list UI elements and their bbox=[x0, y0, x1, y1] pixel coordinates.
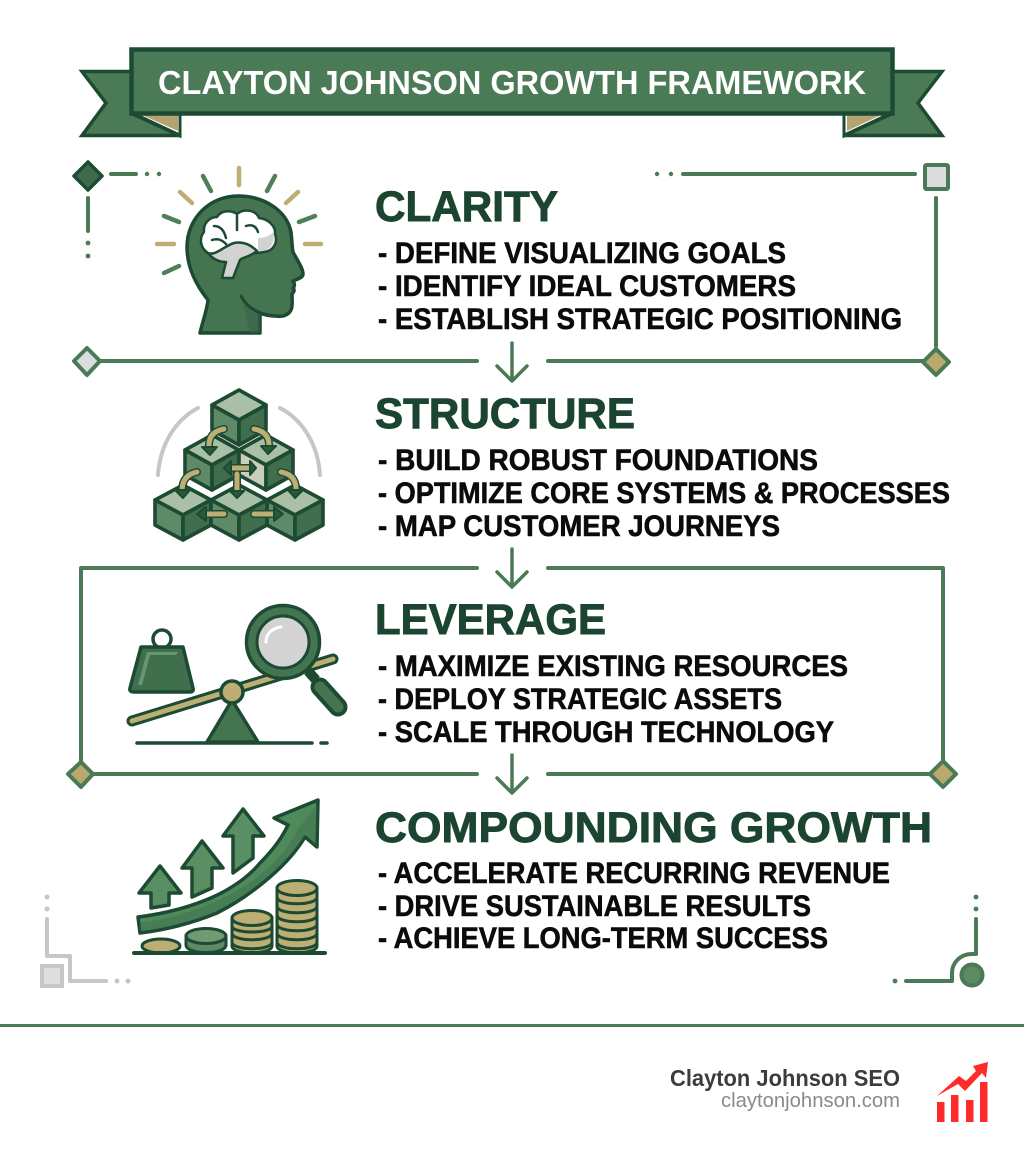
footer brand text: claytonjohnson.com bbox=[721, 1090, 900, 1112]
icon: head with brain bbox=[157, 168, 321, 333]
base line bbox=[134, 951, 325, 955]
heading: STRUCTURE bbox=[375, 390, 635, 438]
bullet list bbox=[378, 444, 950, 543]
bullet list: - ESTABLISH STRATEGIC POSITIONING bbox=[378, 303, 902, 336]
brain bbox=[201, 211, 276, 278]
bullet list: - DEFINE VISUALIZING GOALS bbox=[378, 237, 786, 270]
bullet list: - IDENTIFY IDEAL CUSTOMERS bbox=[378, 270, 796, 303]
bullet list bbox=[378, 650, 848, 749]
frame: bottom-right green ornament bbox=[893, 895, 982, 986]
banner ribbon bbox=[132, 50, 892, 114]
lever beam bbox=[132, 659, 333, 721]
bullet list: - BUILD ROBUST FOUNDATIONS bbox=[378, 444, 818, 477]
arrow: structure to leverage bbox=[497, 549, 527, 587]
footer brand text: Clayton Johnson SEO bbox=[670, 1065, 900, 1091]
frame: top-right corner and side rail bbox=[655, 165, 948, 346]
rays bbox=[157, 168, 321, 273]
bullet list: - DEPLOY STRATEGIC ASSETS bbox=[378, 683, 782, 716]
small up arrows bbox=[139, 809, 264, 908]
head silhouette bbox=[187, 196, 303, 333]
connector 1 with diamonds bbox=[74, 348, 949, 375]
bullet list: - MAP CUSTOMER JOURNEYS bbox=[378, 510, 780, 543]
bullet list bbox=[378, 237, 902, 336]
frame: leverage box bbox=[68, 568, 956, 787]
flow arrows bbox=[175, 429, 303, 521]
frame: bottom-left gray ornament bbox=[42, 894, 130, 986]
icon: lever with weight and magnifier bbox=[130, 606, 338, 743]
bullet list: - ACHIEVE LONG-TERM SUCCESS bbox=[378, 922, 828, 955]
frame: top-left corner ornament bbox=[74, 162, 161, 258]
magnifier bbox=[246, 606, 338, 707]
heading: COMPOUNDING GROWTH bbox=[375, 804, 932, 852]
icon: red growth logo bbox=[937, 1062, 988, 1122]
fulcrum bbox=[207, 700, 258, 742]
banner left tail bbox=[82, 72, 180, 136]
bullet list: - OPTIMIZE CORE SYSTEMS & PROCESSES bbox=[378, 477, 950, 510]
weight bbox=[130, 630, 193, 692]
bullet list: - DRIVE SUSTAINABLE RESULTS bbox=[378, 890, 811, 923]
heading: LEVERAGE bbox=[375, 596, 606, 644]
banner right tail bbox=[844, 72, 942, 136]
section: structure bbox=[375, 390, 950, 543]
section: leverage bbox=[375, 596, 848, 749]
section: clarity bbox=[375, 183, 902, 336]
footer divider bbox=[0, 1024, 1024, 1027]
footer brand text bbox=[670, 1065, 900, 1112]
bullet list: - ACCELERATE RECURRING REVENUE bbox=[378, 857, 890, 890]
bullet list bbox=[378, 857, 890, 955]
bullet list: - SCALE THROUGH TECHNOLOGY bbox=[378, 716, 834, 749]
title text: CLAYTON JOHNSON GROWTH FRAMEWORK bbox=[158, 64, 866, 101]
section: compounding growth bbox=[375, 804, 932, 955]
icon: stacked cubes bbox=[155, 390, 323, 540]
coin stacks bbox=[142, 880, 317, 953]
arrow: clarity to structure bbox=[497, 343, 527, 381]
cubes bbox=[155, 390, 323, 540]
title banner bbox=[82, 50, 942, 136]
ground line bbox=[137, 741, 327, 745]
gray arcs bbox=[158, 408, 320, 475]
big curved arrow bbox=[138, 800, 318, 933]
icon: growth arrow and coins bbox=[134, 800, 325, 953]
heading: CLARITY bbox=[375, 183, 558, 231]
bullet list: - MAXIMIZE EXISTING RESOURCES bbox=[378, 650, 848, 683]
arrow: leverage to growth bbox=[497, 755, 527, 793]
